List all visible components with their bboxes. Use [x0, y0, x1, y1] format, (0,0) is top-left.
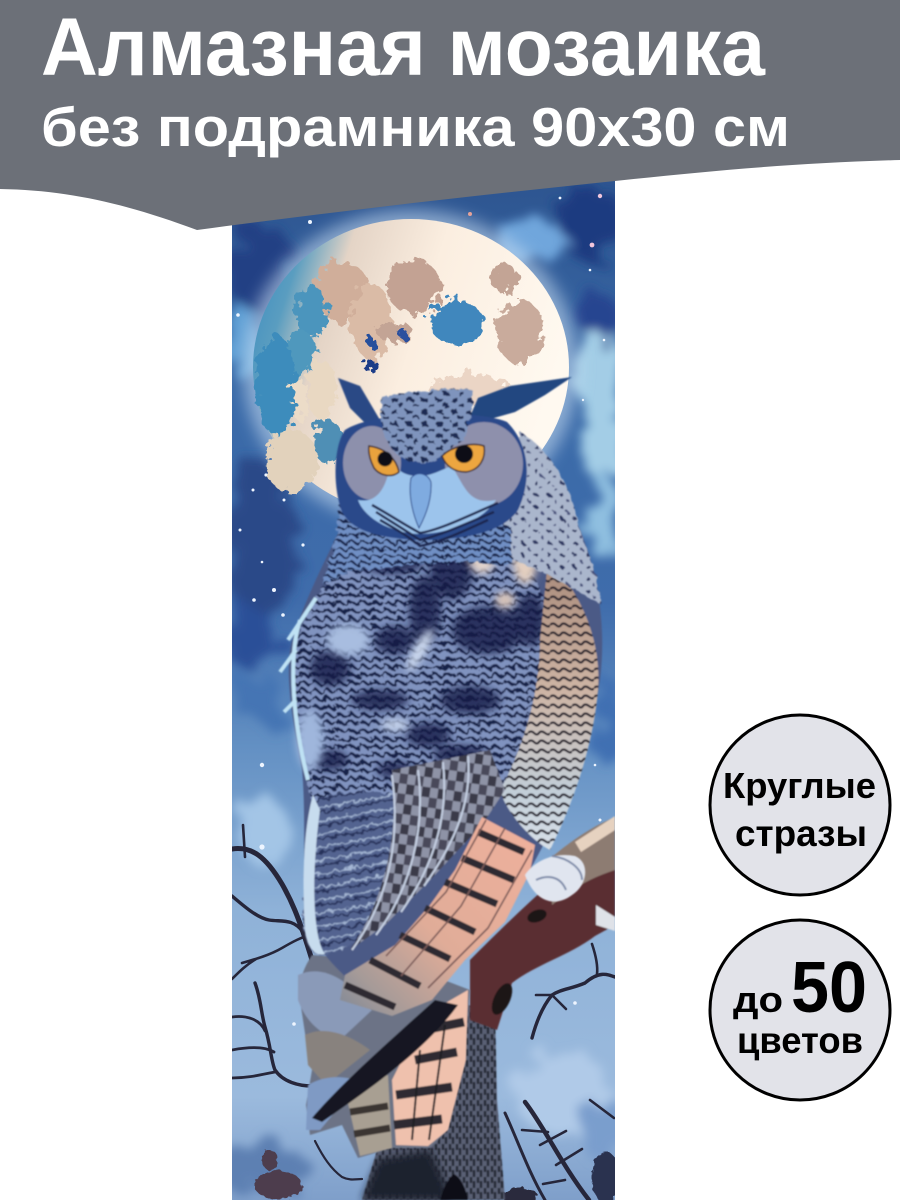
branch under the owl [470, 816, 615, 1030]
head base [336, 414, 527, 540]
header banner [0, 0, 900, 230]
right eye [442, 444, 484, 472]
illustration: owl on a branch with full moon [212, 170, 626, 1200]
badge: round rhinestones: Круглые [723, 765, 876, 806]
badge: up to 50 colours: до [733, 979, 783, 1020]
badge: up to 50 colours: 50 [791, 948, 867, 1028]
beak [410, 474, 431, 528]
left ear tuft [338, 378, 380, 430]
pink banded feathers [340, 817, 535, 1016]
badge: round rhinestones [710, 715, 890, 895]
bushes at the bottom [254, 1150, 620, 1200]
right ear tuft [470, 376, 572, 419]
checkered flight feathers [350, 750, 505, 950]
tree trunk [362, 1000, 505, 1200]
tail feathers [298, 955, 470, 1158]
badge: up to 50 colours [710, 920, 890, 1100]
right neck ruff [500, 432, 602, 605]
right facial disc [445, 422, 523, 506]
talons [525, 855, 585, 902]
night sky background [212, 170, 626, 1200]
left and lower neck ruff [322, 504, 514, 585]
scalloped mantle pattern [294, 560, 544, 802]
scattered stars [236, 194, 605, 1026]
right side striped flank [500, 560, 598, 850]
light breast patches [296, 536, 537, 770]
left eye [369, 446, 399, 475]
owl body [278, 525, 603, 1016]
owl head [322, 377, 602, 605]
title: size subtitle: без подрамника 90х30 см [41, 96, 790, 158]
forehead [381, 389, 472, 463]
tree branches [232, 825, 615, 1200]
badge: round rhinestones: стразы [735, 813, 867, 854]
dark mantle patches [310, 531, 546, 778]
moon glow [243, 210, 579, 526]
centre face feathers [358, 462, 496, 534]
full moon [253, 219, 569, 515]
left wing [304, 792, 398, 955]
badge: up to 50 colours: цветов [737, 1020, 863, 1061]
mouth feather lines [372, 503, 498, 546]
left facial disc [343, 426, 401, 500]
title: main line: Алмазная мозаика [41, 2, 766, 93]
pale wing edge and fringe [304, 795, 325, 954]
